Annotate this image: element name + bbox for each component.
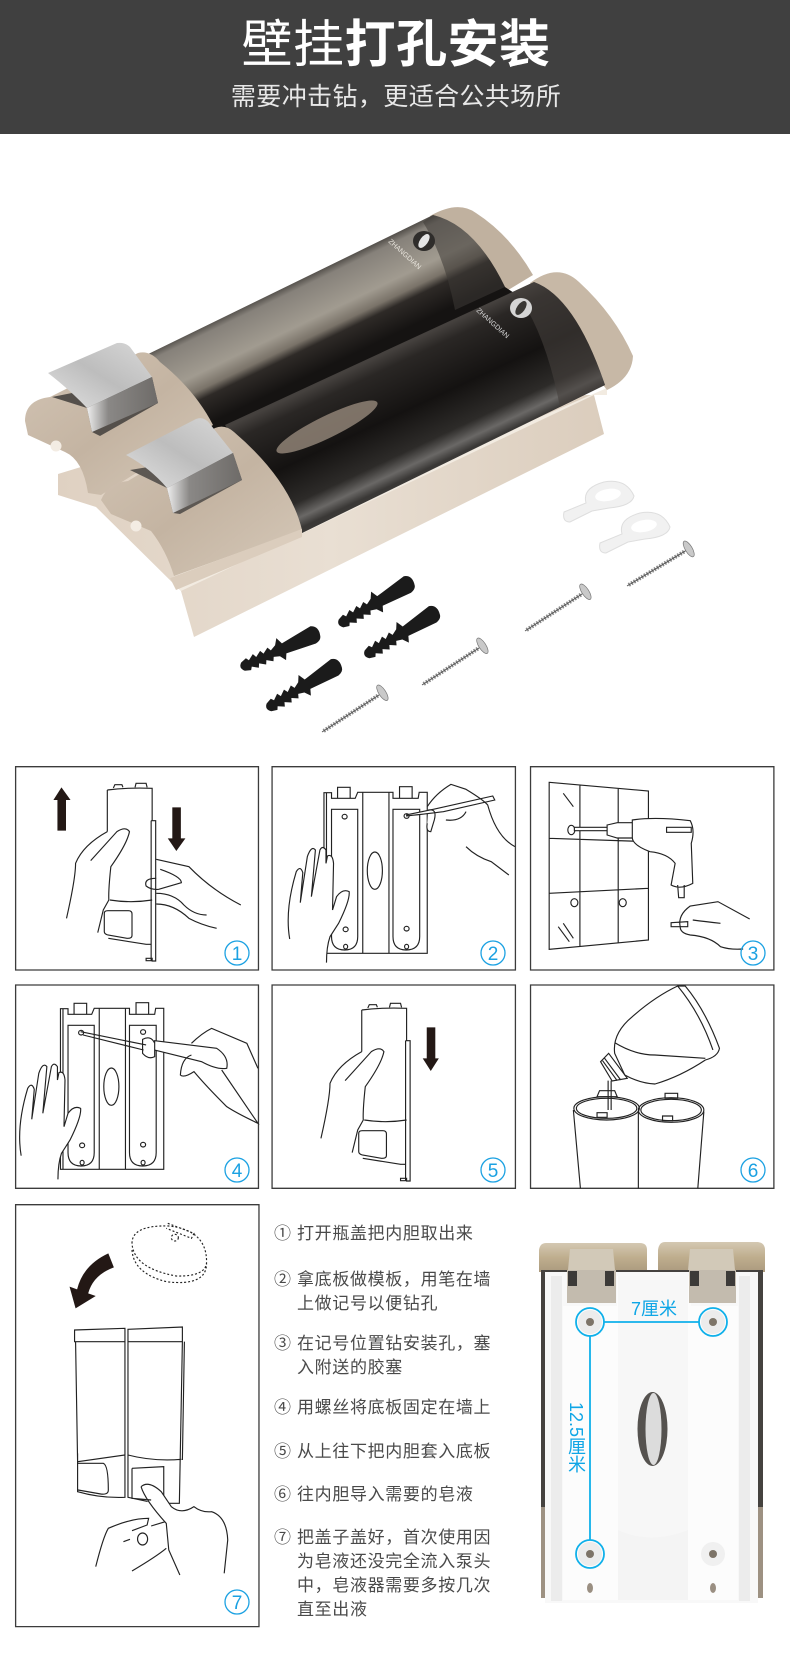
step number 6: 6 <box>748 1161 758 1182</box>
step number 2 <box>481 941 505 965</box>
step instructions <box>274 1224 491 1619</box>
step instructions: 上做记号以便钻孔 <box>297 1294 438 1313</box>
step instructions: ② 拿底板做模板，用笔在墙 <box>274 1269 491 1289</box>
front chrome button <box>130 453 242 514</box>
brand marks: ZHANGDIAN <box>475 307 510 340</box>
panel 2: mark holes <box>272 767 515 970</box>
subtitle: 需要冲击钻，更适合公共场所 <box>231 83 561 111</box>
back dispenser <box>430 207 533 292</box>
step number 2: 2 <box>488 944 498 965</box>
step instructions: 中，皂液器需要多按几次 <box>297 1576 491 1595</box>
arrows up and down <box>53 787 185 851</box>
step number 3 <box>741 941 765 965</box>
panel 7: close cap and press <box>16 1205 259 1627</box>
step instructions: ① 打开瓶盖把内胆取出来 <box>274 1224 474 1243</box>
step number 1: 1 <box>232 944 242 965</box>
panel 6: fill soap <box>531 985 774 1188</box>
back plate photo with dimensions <box>539 1242 765 1603</box>
screws <box>317 539 696 740</box>
dispensers <box>75 1328 125 1497</box>
step number 4 <box>225 1158 249 1182</box>
brand marks <box>387 231 532 340</box>
step instructions: ⑦ 把盖子盖好，首次使用因 <box>274 1527 491 1547</box>
step number 5 <box>481 1158 505 1182</box>
product photo: double soap dispenser with accessories <box>25 207 696 740</box>
step instructions: ④ 用螺丝将底板固定在墙上 <box>274 1398 491 1417</box>
dashed cap <box>132 1223 207 1283</box>
front dispenser <box>530 272 633 390</box>
panel 3: drill <box>531 767 774 970</box>
step instructions: ③ 在记号位置钻安装孔，塞 <box>274 1334 491 1353</box>
step instructions: ⑥ 往内胆导入需要的皂液 <box>274 1485 474 1504</box>
step number 5: 5 <box>488 1161 498 1182</box>
step number 7 <box>225 1590 249 1614</box>
step instructions: ⑤ 从上往下把内胆套入底板 <box>274 1442 491 1461</box>
step number 3: 3 <box>748 944 758 965</box>
panel 4: screw plate <box>16 985 258 1188</box>
white wall plugs <box>564 481 670 553</box>
brand marks: ZHANGDIAN <box>387 238 422 271</box>
step number 7: 7 <box>232 1593 242 1614</box>
step number 6 <box>741 1158 765 1182</box>
dimension label: width: 7厘米 <box>631 1299 677 1319</box>
blue dimension lines <box>576 1308 727 1568</box>
pressing hands <box>96 1484 228 1575</box>
step instructions: 直至出液 <box>297 1600 368 1619</box>
base plate <box>58 395 604 637</box>
header band <box>0 0 790 134</box>
panel 1: remove liner <box>16 767 258 970</box>
step number 4: 4 <box>232 1161 243 1182</box>
dimension label: height: 12.5厘米 <box>566 1402 586 1473</box>
step instructions: 入附送的胶塞 <box>297 1358 403 1377</box>
step number 1 <box>225 941 249 965</box>
back chrome button <box>52 377 158 436</box>
title: 壁挂打孔安装 <box>241 16 551 73</box>
panel 5: insert liner <box>272 985 515 1188</box>
black anchors <box>236 571 445 719</box>
step instructions: 为皂液还没完全流入泵头 <box>297 1552 491 1571</box>
curved arrow <box>70 1253 114 1308</box>
